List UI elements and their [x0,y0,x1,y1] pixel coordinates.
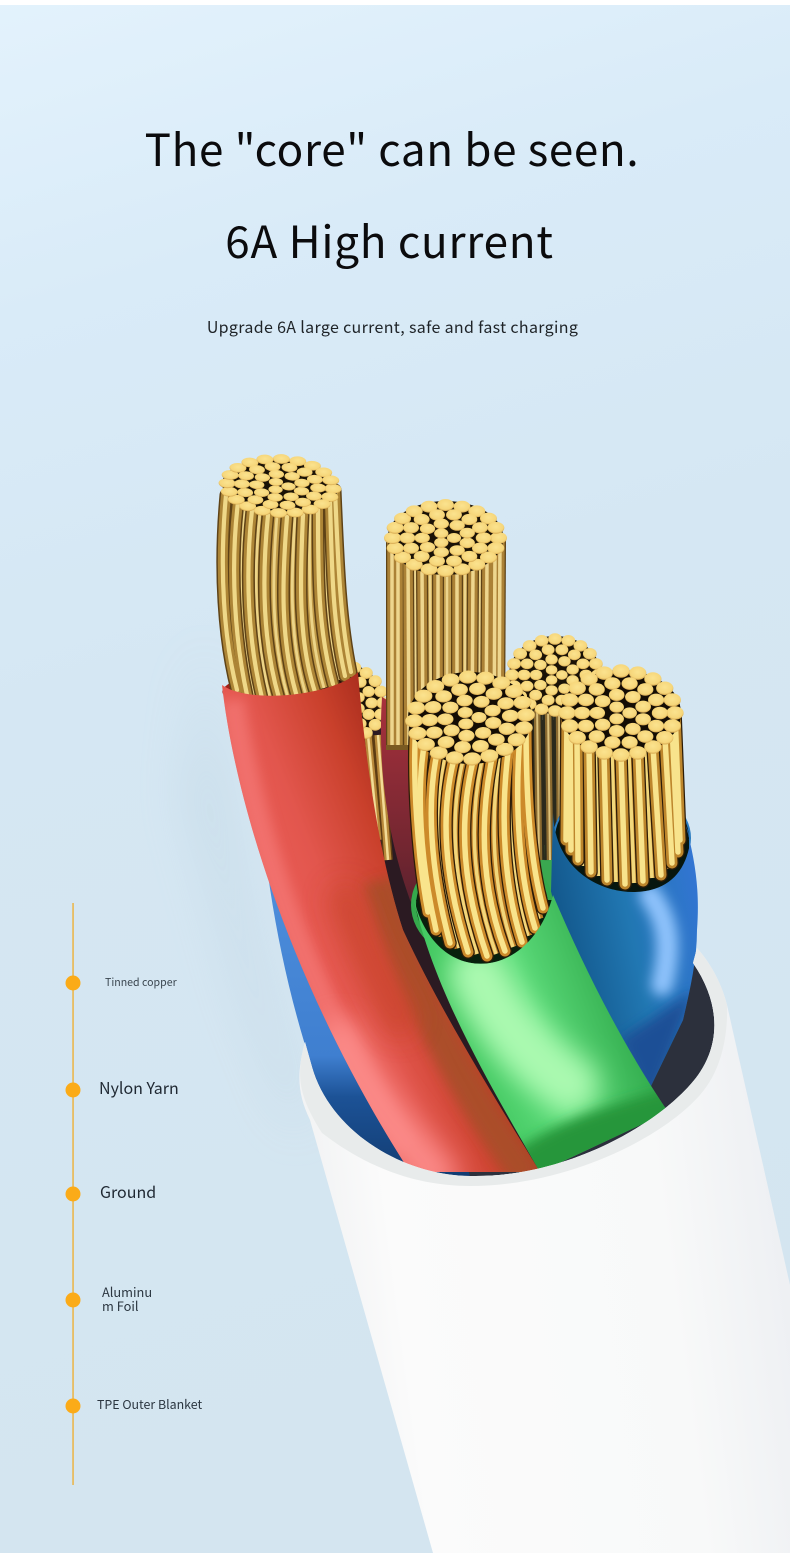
title [145,115,639,271]
back-right copper bundle [505,633,605,900]
center copper bundle [384,499,507,750]
legend item: ground [66,1179,156,1203]
legend item: TPE outer blanket: TPE Outer Blanket [97,1395,202,1413]
title: 6A High current [225,207,554,271]
legend axis line [72,903,74,1485]
timeline legend [66,903,202,1485]
legend item: ground: Ground [100,1179,156,1203]
red wire [217,451,540,1180]
legend item: aluminum foil: m Foil [102,1296,139,1315]
subtitle: Upgrade 6A large current, safe and fast charging [207,314,578,338]
blue wire right [550,664,698,1110]
dark red wire behind [381,697,480,970]
legend item: tinned copper [66,975,178,990]
title: The "core" can be seen. [145,115,639,179]
cable cavity [312,936,714,1176]
cable illustration [217,451,790,1553]
legend item: aluminum foil [66,1282,152,1315]
dark backing between wires [368,720,565,1172]
legend item: aluminum foil: Aluminu [102,1282,152,1301]
green wire [405,670,666,1168]
back-left copper bundle [294,660,390,860]
white TPE jacket [299,948,790,1553]
legend item: tinned copper: Tinned copper [105,975,178,990]
legend item: nylon yarn: Nylon Yarn [99,1075,179,1099]
blue wire behind red [266,860,470,1176]
